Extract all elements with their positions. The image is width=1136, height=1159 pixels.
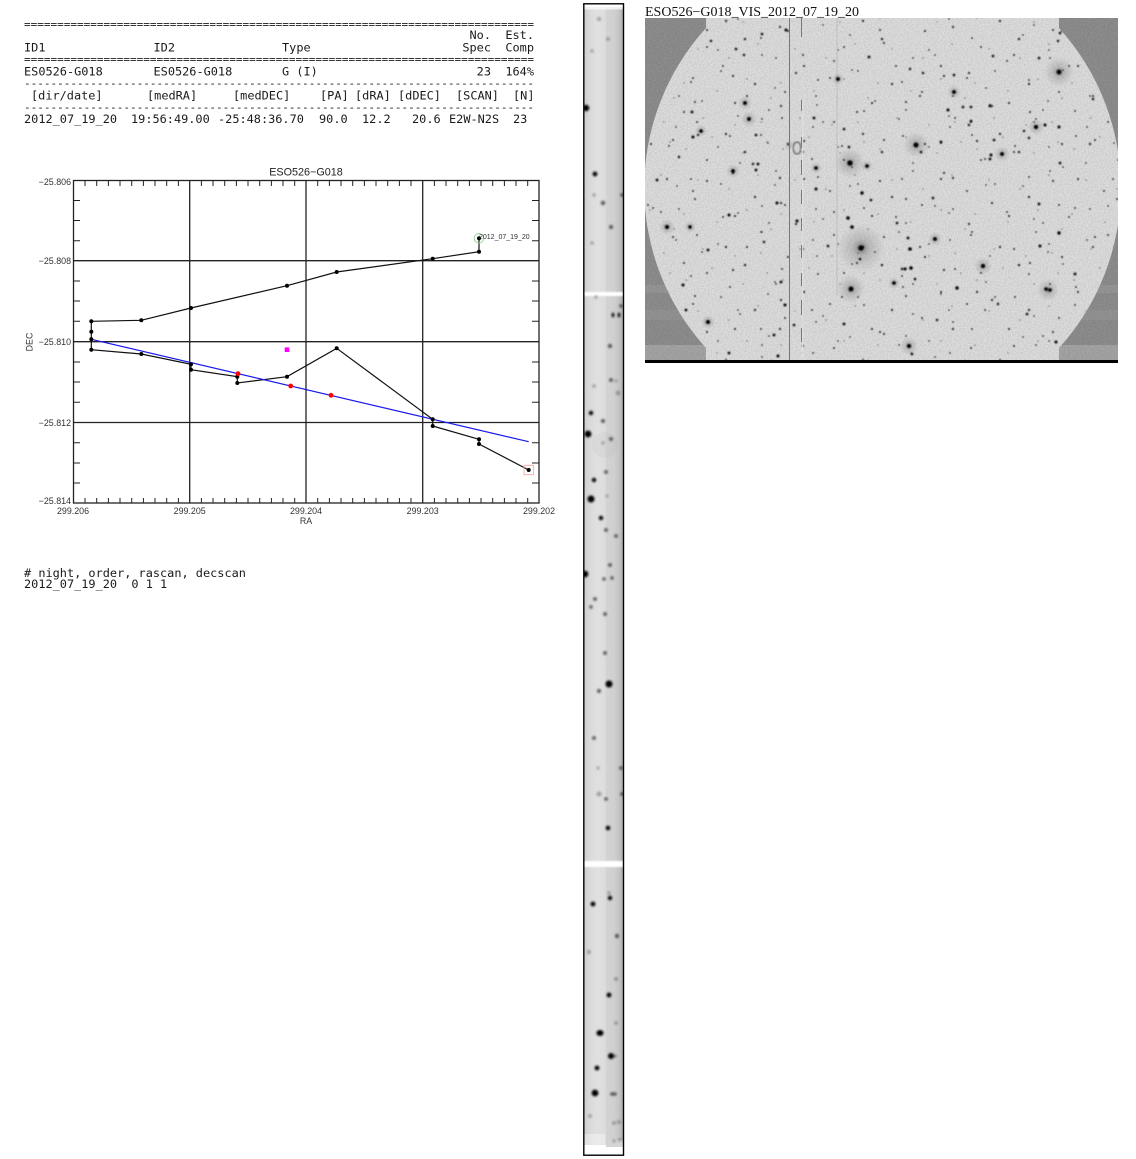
bright stars [656, 28, 1094, 358]
bottom image edge bar [645, 360, 1118, 363]
summary table: ----------------------------------------------------------------------------- [24, 77, 534, 90]
summary table: [dRA] [355, 88, 391, 102]
star halos [659, 57, 1074, 355]
scan points [89, 236, 531, 472]
red end square [524, 465, 533, 475]
scan order note [24, 566, 246, 591]
summary table: [dDEC] [398, 88, 441, 102]
summary table: 164% [505, 64, 534, 78]
summary table [24, 18, 534, 126]
x axis labels: 299.204 [290, 506, 322, 516]
x axis labels: RA [300, 516, 312, 526]
plot title: ESO526−G018 [269, 166, 343, 178]
summary table: 2012_07_19_20 [24, 112, 117, 126]
summary table: -25:48:36.70 [218, 112, 304, 126]
spectral strip image [582, 4, 624, 1155]
x axis labels [57, 506, 555, 526]
detector column line [788, 18, 790, 360]
image title: ESO526−G018_VIS_2012_07_19_20 [645, 5, 859, 20]
x axis labels: 299.203 [407, 506, 439, 516]
strip frame [584, 4, 624, 1155]
scan position plot [24, 166, 555, 526]
faint star field [645, 18, 1118, 360]
summary table: 90.0 [319, 112, 348, 126]
nebula ring [793, 142, 801, 154]
image noise overlay [645, 18, 1118, 360]
summary table: [medRA] [147, 88, 197, 102]
y axis labels [24, 177, 71, 506]
summary table: ----------------------------------------------------------------------------- [24, 101, 534, 114]
night label: 2012_07_19_20 [479, 234, 530, 241]
y axis labels: DEC [24, 332, 34, 351]
summary table: ID2 [154, 40, 175, 54]
magenta median marker [285, 347, 289, 352]
summary table: [N] [513, 88, 534, 102]
green start circle [474, 234, 484, 243]
summary table: [medDEC] [233, 88, 290, 102]
summary table: G (I) [282, 64, 318, 78]
summary table: Spec [462, 40, 491, 54]
x axis labels: 299.202 [523, 506, 555, 516]
summary table: [PA] [320, 88, 349, 102]
detector artefact lines [836, 18, 838, 296]
y axis labels: −25.812 [39, 418, 71, 428]
summary table: ES0526-G018 [24, 64, 103, 78]
summary table: [dir/date] [31, 88, 103, 102]
scan order note: # night, order, rascan, decscan [24, 566, 246, 580]
plot axes and grid [73, 180, 539, 503]
summary table: Type [282, 40, 311, 54]
summary table: 23 [513, 112, 527, 126]
summary table: Comp [505, 40, 534, 54]
sky survey image [644, 18, 1121, 363]
summary table: 19:56:49.00 [131, 112, 210, 126]
summary table: ID1 [24, 40, 45, 54]
summary table: ES0526-G018 [154, 64, 232, 78]
y axis labels: −25.810 [39, 337, 71, 347]
blue fit line [91, 339, 529, 442]
y axis labels: −25.808 [39, 256, 71, 266]
y axis labels: −25.814 [39, 496, 71, 506]
y axis labels: −25.806 [39, 177, 71, 187]
x axis labels: 299.206 [57, 506, 89, 516]
summary table: 20.6 [412, 112, 441, 126]
summary table: 23 [477, 64, 491, 78]
scan path line [91, 238, 529, 470]
x axis labels: 299.205 [174, 506, 206, 516]
summary table: 12.2 [362, 112, 391, 126]
scan order note: 2012_07_19_20 0 1 1 [24, 577, 167, 591]
summary table: No. [470, 28, 491, 42]
summary table: E2W-N2S [449, 112, 499, 126]
summary table: Est. [505, 28, 534, 42]
red fit points [236, 371, 333, 398]
summary table: [SCAN] [456, 88, 499, 102]
summary table: ============================================================================= [24, 18, 534, 31]
summary table: ============================================================================= [24, 53, 534, 66]
